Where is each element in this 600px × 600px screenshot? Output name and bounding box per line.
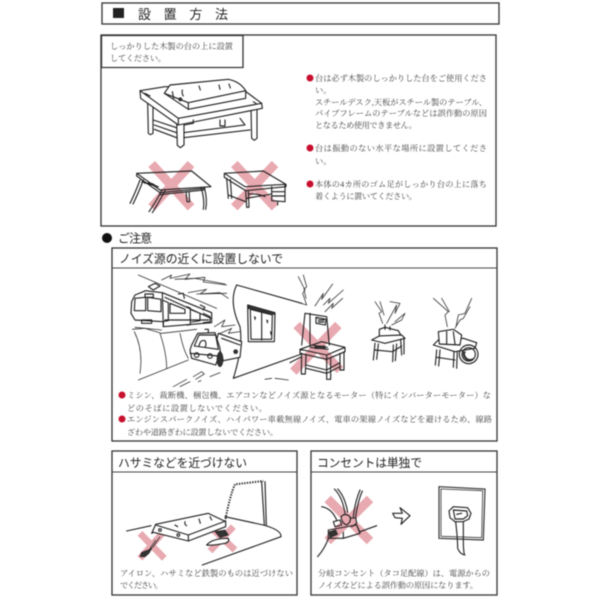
building wall — [233, 285, 302, 378]
noise warning text: ざわや道路ぎわに設置しないでください。 — [127, 427, 278, 437]
illustration: unsuitable steel table with red cross — [130, 164, 211, 213]
panel: use a dedicated outlet — [311, 451, 497, 595]
icon: arrow — [393, 508, 410, 524]
title text: 設 置 方 法 — [138, 7, 228, 22]
panel: installation on a wooden stand — [101, 35, 496, 226]
panel: keep scissors away — [112, 451, 297, 595]
illustration: motor machine on table — [433, 298, 478, 368]
caption box: してください。 — [110, 54, 166, 63]
window — [248, 305, 275, 342]
section heading: cautions — [102, 232, 152, 246]
instruction 1 — [306, 73, 487, 130]
body text — [120, 568, 293, 590]
title bar: installation method — [102, 3, 499, 24]
illustration: overloaded socket with red cross — [318, 489, 377, 557]
instruction 2: 台は振動のない水平な場所に設置してくださ — [315, 143, 487, 153]
truck — [217, 333, 242, 361]
noise warning text: エンジンスパークノイズ、ハイパワー車載無線ノイズ、電車の架線ノイズなどを避けるため、線路 — [127, 414, 492, 424]
body text: アイロン、ハサミなど鉄製のものは近づけない — [120, 568, 293, 578]
panel heading: コンセントは単独で — [317, 456, 422, 470]
instruction 1: スチールデスク,天板がスチール製のテーブル、 — [315, 97, 487, 107]
section heading: cautions: ご注意 — [118, 232, 152, 246]
caption box — [102, 36, 243, 68]
railway embankment — [132, 327, 288, 387]
panel heading: ハサミなどを近づけない — [118, 456, 247, 470]
red bullet — [306, 74, 314, 82]
caption box: しっかりした木製の台の上に設置 — [110, 41, 233, 51]
train — [131, 291, 212, 327]
title icon: black square — [113, 8, 124, 18]
body text: でください。 — [120, 581, 163, 590]
instruction 2 — [306, 143, 487, 166]
instruction 3: 本体の4カ所のゴム足がしっかり台の上に落ち — [315, 179, 487, 189]
illustration: train, truck and building — [131, 274, 302, 387]
illustration: correct solid wooden table — [140, 79, 262, 148]
body text: 分岐コンセント（タコ足配線）は、電源からの — [318, 568, 490, 578]
instruction 1: い。 — [315, 86, 331, 95]
panel heading: ノイズ源の近くに設置しないで — [119, 252, 283, 266]
illustration: unit on desk with scissors and iron — [127, 481, 281, 565]
illustration: sewing machine on table — [372, 302, 405, 362]
illustration: unsuitable desk with red cross — [224, 164, 286, 207]
overhead wire and bolts — [138, 274, 228, 308]
body text: ノイズなどによる誤作動の原因になります。 — [318, 580, 478, 590]
noise warning text — [118, 390, 492, 437]
illustration: machine on table with red cross — [290, 275, 345, 379]
body text — [318, 568, 490, 590]
instruction 1: となるため使用できません。 — [315, 120, 417, 130]
instruction 3: 着くように置いてください。 — [315, 191, 417, 201]
panel: keep away from noise sources — [112, 248, 497, 441]
instruction 1: 台は必ず木製のしっかりした台をご使用くださ — [315, 73, 487, 83]
illustration: single plug in wall outlet — [439, 487, 485, 555]
instruction 1: パイプフレームのテーブルなどは誤作動の原因 — [315, 108, 487, 118]
instruction 2: い。 — [315, 157, 331, 166]
instruction 3 — [306, 179, 487, 201]
noise warning text: どのそばに設置しないでください。 — [127, 403, 267, 413]
noise warning text: ミシン、裁断機、梱包機、エアコンなどノイズ源となるモーター（特にインバーターモーター）な — [127, 390, 491, 400]
